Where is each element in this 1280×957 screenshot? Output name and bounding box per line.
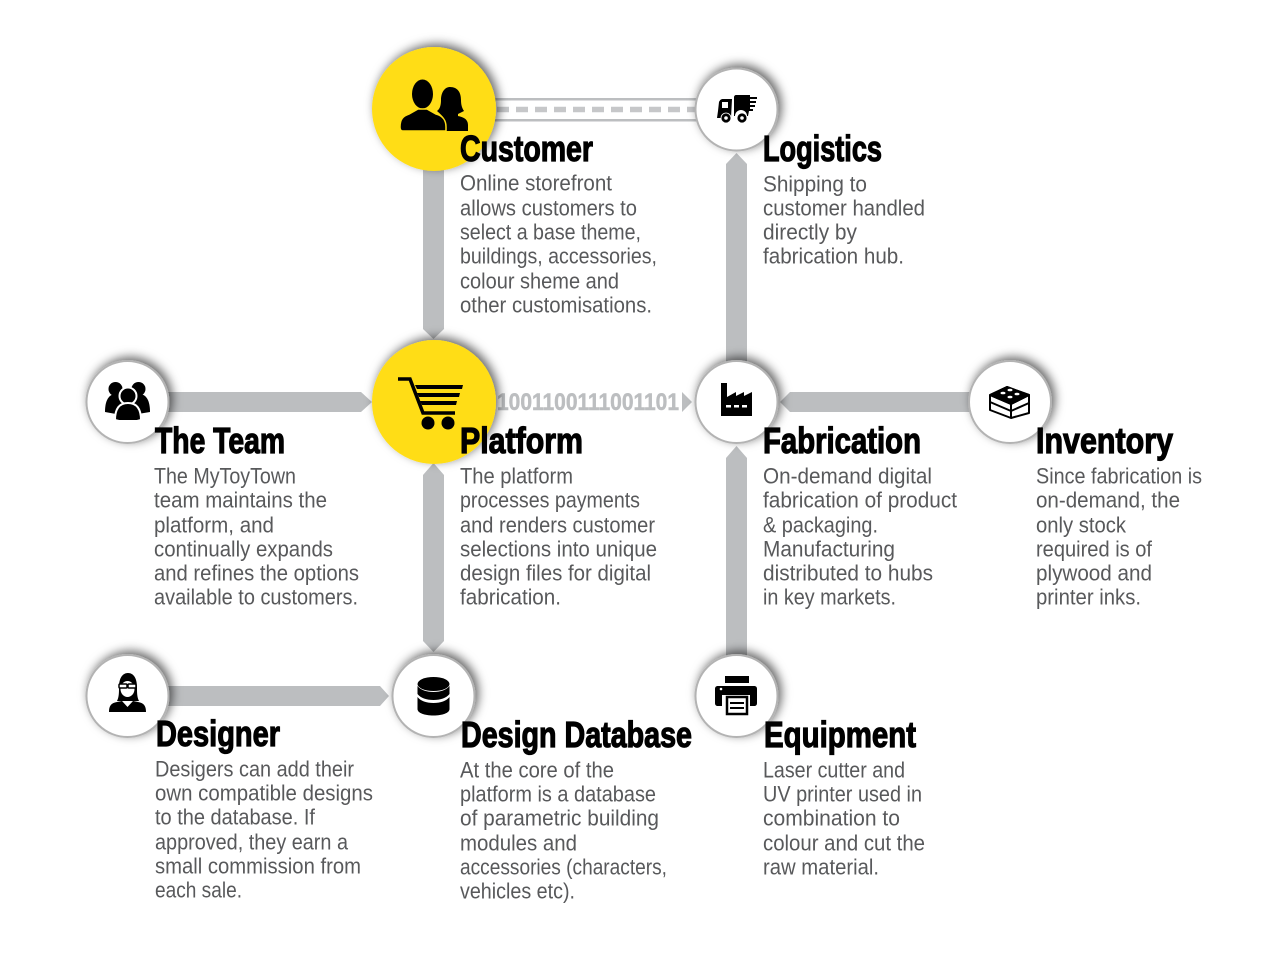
description: fabrication: fabrication of product [763,488,957,512]
heading: inventory: Inventory [1036,420,1173,461]
description: the team: and refines the options [154,560,359,586]
description: the team: platform, and [154,512,274,538]
text block: logistics [763,128,925,268]
description: fabrication: On-demand digital [763,464,932,488]
text block: the team [154,420,359,610]
description: the team: continually expands [154,536,333,562]
description: equipment: UV printer used in [763,782,922,806]
description: inventory: Since fabrication is [1036,464,1202,488]
description: the team: team maintains the [154,488,327,512]
text block: inventory [1036,420,1202,610]
description: logistics [763,172,925,268]
description: inventory: plywood and [1036,560,1152,586]
description: fabrication: distributed to hubs [763,560,933,586]
node: designer circle [86,655,168,737]
description: design database [460,758,667,904]
description: designer: each sale. [155,878,242,902]
arrow: platform and design database [423,463,444,652]
node: logistics circle [696,68,778,150]
description: platform: design files for digital [460,560,651,586]
description: inventory: only stock [1036,512,1127,538]
icon: printer [715,676,757,714]
description: designer [155,756,373,902]
description: platform [460,464,657,610]
description: customer: other customisations. [460,292,652,318]
description: designer: own compatible designs [155,780,373,806]
description: design database: vehicles etc). [460,878,575,904]
node: design database circle [392,655,474,737]
description: equipment: raw material. [763,854,879,880]
icon: shopping cart [398,379,463,430]
icon: customer people [400,80,468,131]
arrow: equipment to fabrication [726,446,747,665]
description: logistics: Shipping to [763,172,867,196]
arrow: team to platform [160,392,372,412]
description: logistics: fabrication hub. [763,244,904,268]
arrow: designer to database [160,686,389,706]
heading: equipment: Equipment [764,714,916,755]
description: fabrication: & packaging. [763,512,878,538]
description: fabrication: in key markets. [763,584,896,610]
heading: customer: Customer [460,128,593,169]
description: customer: buildings, accessories, [460,244,657,268]
arrow: fabrication to logistics [726,153,747,370]
description: inventory: required is of [1036,536,1153,562]
description: the team [154,464,359,610]
description: fabrication: Manufacturing [763,536,895,562]
arrow: inventory to fabrication [780,392,975,412]
text block: equipment [763,714,925,880]
description: logistics: directly by [763,220,857,244]
node: customer circle [372,47,496,171]
description: customer: colour sheme and [460,268,619,294]
node: inventory circle [969,361,1051,443]
description: inventory: on-demand, the [1036,488,1180,512]
description: inventory: printer inks. [1036,584,1141,610]
description: platform: The platform [460,464,573,488]
dashed link: logistics to customer [490,98,700,122]
icon: brick [990,387,1029,418]
description: customer: select a base theme, [460,220,641,244]
heading: the team: The Team [155,420,285,461]
icon: team group [105,382,150,421]
description: platform: selections into unique [460,536,657,562]
description: equipment [763,758,925,880]
description: platform: fabrication. [460,584,561,610]
node: equipment circle [696,655,778,737]
description: designer: Desigers can add their [155,756,354,782]
heading: fabrication: Fabrication [763,420,921,461]
description: design database: of parametric building [460,806,659,830]
description: equipment: combination to [763,806,900,830]
description: the team: available to customers. [154,584,358,610]
description: customer: Online storefront [460,170,612,196]
icon: factory [721,383,752,416]
text block: customer [460,128,657,318]
description: logistics: customer handled [763,196,925,220]
icon: designer with glasses [109,673,146,712]
heading: platform: Platform [460,420,583,461]
heading: designer: Designer [156,713,280,754]
description: platform: processes payments [460,488,640,512]
heading: logistics: Logistics [763,128,882,169]
description: fabrication [763,464,957,610]
description: customer [460,170,657,318]
description: equipment: colour and cut the [763,830,925,856]
node: platform circle [372,340,496,464]
arrow: customer to platform [423,165,444,339]
description: designer: approved, they earn a [155,830,349,854]
description: designer: small commission from [155,854,361,878]
description: design database: modules and [460,830,577,856]
heading: design database: Design Database [461,714,692,755]
description: designer: to the database. If [155,804,316,830]
node: fabrication circle [696,361,778,443]
icon: delivery truck [717,95,757,123]
text block: designer [155,713,373,902]
description: design database: accessories (characters, [460,854,667,880]
description: platform: and renders customer [460,512,655,538]
description: design database: platform is a database [460,782,656,806]
description: customer: allows customers to [460,196,637,220]
node: team circle [86,361,168,443]
description: equipment: Laser cutter and [763,758,905,782]
binary data stream: 1001100111001101 [497,389,679,416]
text block: platform [460,420,657,610]
text block: design database [460,714,692,904]
description: the team: The MyToyTown [154,464,296,488]
description: design database: At the core of the [460,758,614,782]
description: inventory [1036,464,1202,610]
icon: database cylinder [418,677,450,716]
text block: fabrication [763,420,957,610]
